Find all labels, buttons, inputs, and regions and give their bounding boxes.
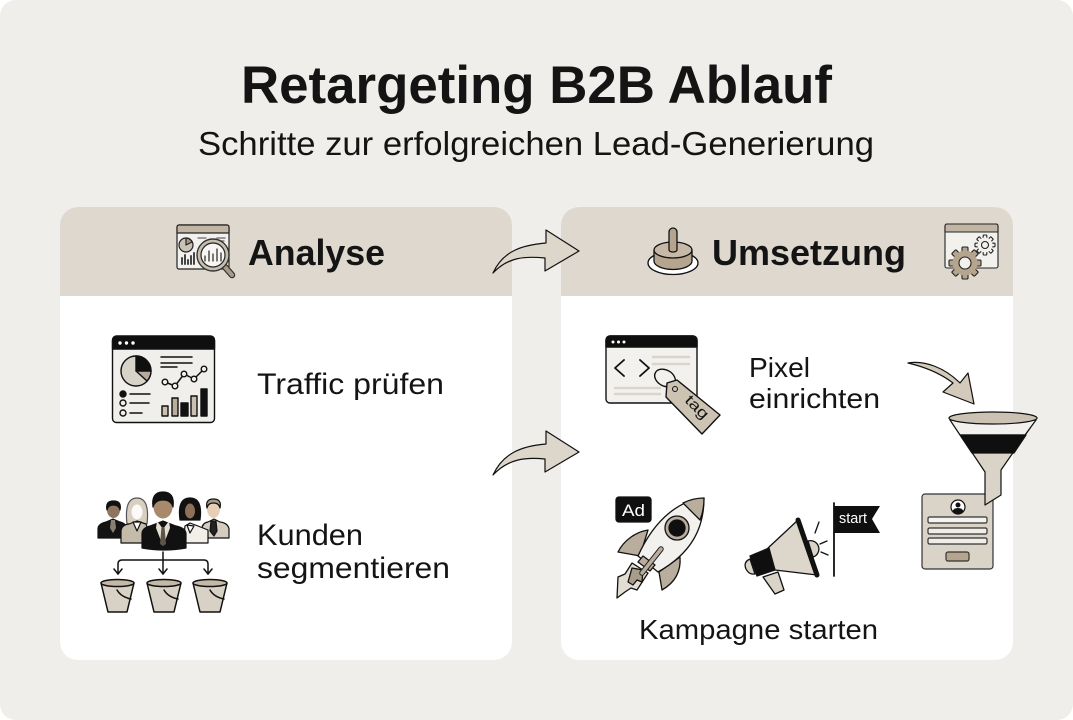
person: far left bbox=[98, 501, 127, 538]
text: Pixel einrichten: Pixel bbox=[749, 352, 810, 383]
icon: code window with tag bbox=[606, 336, 720, 434]
text: Pixel einrichten: einrichten bbox=[749, 383, 880, 414]
text: Kunden segmentieren: segmentieren bbox=[257, 552, 450, 585]
person: second left bbox=[121, 498, 152, 543]
arrows: split into three buckets bbox=[114, 552, 212, 574]
icon: megaphone bbox=[745, 520, 828, 594]
icon: push button bbox=[648, 228, 698, 274]
panel: Analyse bbox=[60, 207, 512, 660]
text: Traffic prüfen: Traffic prüfen bbox=[257, 368, 444, 401]
icon: start flag: start bbox=[839, 511, 867, 527]
icon: lead form bbox=[922, 494, 993, 569]
arrow: Analyse to Umsetzung (bottom) bbox=[493, 431, 579, 475]
bucket 3 bbox=[193, 580, 227, 612]
panel: Umsetzung bbox=[561, 207, 1037, 660]
arrow: Analyse to Umsetzung (top) bbox=[493, 230, 579, 273]
title: Retargeting B2B Ablauf bbox=[241, 56, 832, 115]
text: Kunden segmentieren bbox=[257, 519, 450, 585]
subtitle: Schritte zur erfolgreichen Lead-Generierung bbox=[198, 125, 874, 162]
text: Pixel einrichten bbox=[749, 352, 880, 414]
icon: rocket with Ad badge bbox=[616, 497, 704, 598]
person: second right bbox=[179, 498, 208, 543]
Ad badge: Ad bbox=[622, 501, 645, 520]
icon: traffic dashboard bbox=[112, 336, 214, 422]
icon: settings window with gears bbox=[945, 224, 998, 279]
icon: funnel bbox=[949, 412, 1037, 505]
icon: analytics window with magnifier bbox=[177, 225, 232, 275]
person: far right bbox=[202, 499, 229, 538]
heading: Analyse: Analyse bbox=[248, 232, 385, 273]
text: Kunden segmentieren: Kunden bbox=[257, 519, 363, 552]
bucket 2 bbox=[147, 580, 181, 612]
arrow: into funnel bbox=[908, 362, 974, 404]
tag label: tag bbox=[681, 392, 712, 423]
heading: Umsetzung: Umsetzung bbox=[712, 232, 906, 273]
text: Kampagne starten: Kampagne starten bbox=[639, 614, 878, 645]
person: center bbox=[142, 492, 186, 550]
icon: start flag bbox=[834, 503, 880, 576]
bucket 1 bbox=[101, 580, 134, 612]
icon: customer group sorted into buckets bbox=[98, 492, 229, 612]
